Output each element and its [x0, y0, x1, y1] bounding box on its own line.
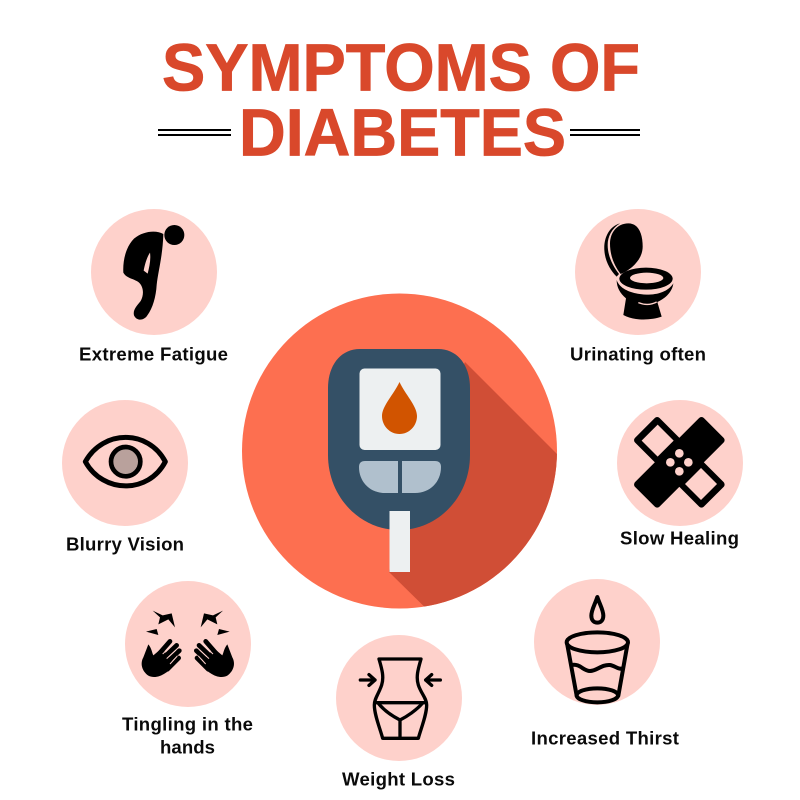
- icon: bent-over tired figure: [123, 225, 184, 320]
- symptom: blurry vision: [62, 400, 188, 554]
- symptom: urinating often: [570, 209, 706, 364]
- icon: crossed bandages: [633, 416, 726, 509]
- title: SYMPTOMS OF: [162, 30, 640, 106]
- icon: eye: [85, 437, 165, 486]
- symptom: weight loss: [336, 635, 462, 790]
- icon: toilet: [604, 223, 673, 319]
- symptom: slow healing: [617, 400, 743, 548]
- title: DIABETES: [239, 96, 566, 170]
- symptom: tingling in the hands: Tingling in the: [122, 714, 253, 734]
- symptom: blurry vision: Blurry Vision: [66, 534, 184, 554]
- central glucose meter illustration: [242, 294, 557, 608]
- icon: tingling hands: [142, 611, 234, 677]
- icon: waist with arrows: [360, 659, 440, 738]
- symptom: extreme fatigue: [79, 209, 228, 364]
- symptom: tingling in the hands: hands: [160, 736, 215, 758]
- symptom: urinating often: Urinating often: [570, 344, 706, 364]
- symptom: tingling in the hands: [122, 581, 253, 758]
- icon: glass of water with drop: [567, 597, 628, 702]
- title: [158, 30, 640, 170]
- symptom: extreme fatigue: Extreme Fatigue: [79, 344, 228, 364]
- symptom: slow healing: Slow Healing: [620, 528, 739, 548]
- symptom: increased thirst: Increased Thirst: [531, 728, 679, 748]
- symptom: weight loss: Weight Loss: [342, 768, 455, 790]
- symptom: increased thirst: [531, 579, 679, 748]
